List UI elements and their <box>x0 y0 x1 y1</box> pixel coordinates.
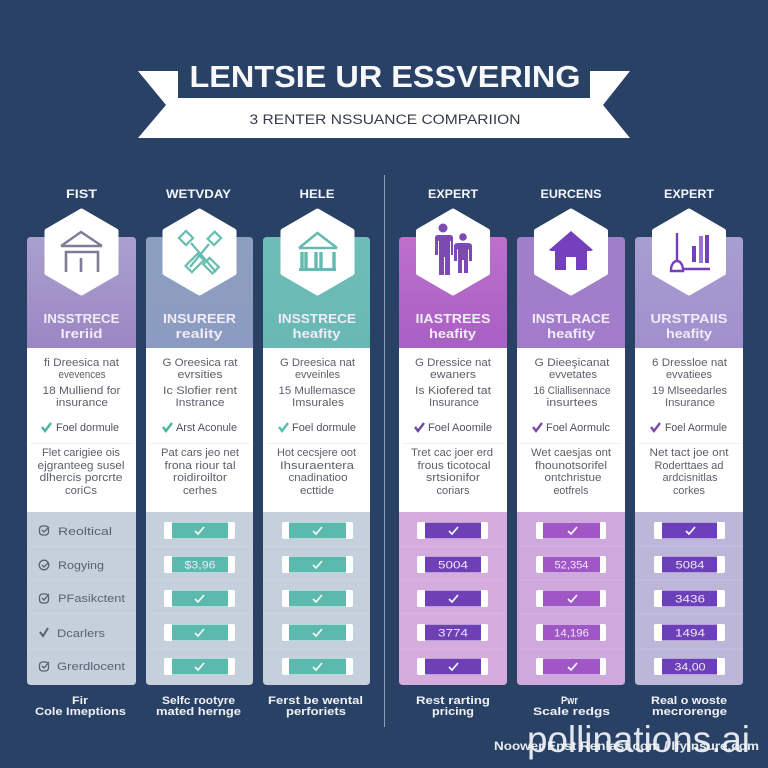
plan details <box>411 357 493 497</box>
value badges: 52,354 <box>554 560 588 572</box>
plan details: Is Kiofered tat <box>415 385 491 397</box>
panel: column 1: Cole Imeptions <box>35 706 126 718</box>
panel: column 4 <box>399 187 507 718</box>
value badges: 34,00 <box>674 662 706 674</box>
value badges: 3436 <box>675 594 705 606</box>
plan details: evvetates <box>549 369 597 381</box>
plan details: Instrance <box>176 397 224 409</box>
value badges: 1494 <box>675 628 705 640</box>
panel: column 5: heafity <box>547 326 596 341</box>
plan details: fhounotsorifel <box>535 460 607 472</box>
plan details <box>38 357 124 497</box>
plan details: Insurance <box>665 397 715 409</box>
plan details: roidiroiltor <box>173 472 227 484</box>
value badges <box>536 522 606 675</box>
plan name: IIASTREES <box>416 311 491 326</box>
plan details: corkes <box>673 485 705 497</box>
panel: column 2: reality <box>176 326 223 341</box>
plan details <box>161 357 239 497</box>
check badges <box>282 522 353 675</box>
plan details: fi Dreesica nat <box>44 357 119 369</box>
plan details: Net tact joe ont <box>650 447 728 459</box>
plan details: Foel Aormule <box>665 422 727 434</box>
panel: column 3: perforiets <box>286 706 346 718</box>
plan details: frous ticotocal <box>418 460 490 472</box>
feature rows: Reoltical <box>58 526 112 538</box>
plan details: 6 Dressloe nat <box>652 357 727 369</box>
center divider <box>384 175 386 727</box>
panel: column 3 <box>263 187 370 718</box>
plan name: INSTLRACE <box>532 311 610 326</box>
panel: column 4: heafity <box>429 326 477 341</box>
plan details: Foel dormule <box>56 422 119 434</box>
plan details: ejgranteeg susel <box>38 460 124 472</box>
plan details: Foel Aoomile <box>428 422 492 434</box>
plan details: dlhercis porcrte <box>40 472 122 484</box>
feature rows: Rogying <box>58 560 104 572</box>
value badges: 5004 <box>438 560 468 572</box>
plan details: Hot cecsjere oot <box>277 447 356 459</box>
icon: house <box>47 211 116 293</box>
value badges <box>164 522 235 675</box>
caption: Fir <box>72 695 89 707</box>
column heading: FIST <box>66 187 98 201</box>
plan details: 15 Mullemasce <box>278 385 356 397</box>
feature rows: Grerdlocent <box>57 661 125 673</box>
panel: column 6: mecrorenge <box>652 706 727 718</box>
plan details: G Dieeşicanat <box>534 357 610 369</box>
caption: Real o woste <box>651 695 727 707</box>
plan details: evevences <box>58 369 106 381</box>
plan details: ardcisnitlas <box>662 472 718 484</box>
title banner <box>138 59 630 138</box>
icon: bank building <box>283 211 352 293</box>
feature rows: PFasikctent <box>58 593 125 605</box>
plan details: Arst Aconule <box>176 422 237 434</box>
icon: two people <box>418 211 488 293</box>
plan details: evvatiees <box>666 369 712 381</box>
plan details: Ihsuraentera <box>280 460 355 472</box>
plan details: coriars <box>436 485 470 497</box>
plan details: cnadinatioo <box>288 472 348 484</box>
panel: column 6 <box>635 187 743 718</box>
value badges: 5084 <box>676 560 704 572</box>
plan details: Insurance <box>429 397 479 409</box>
plan details: evveinles <box>295 369 340 381</box>
watermark: pollinations.ai <box>527 719 750 760</box>
plan details: 18 Mulliend for <box>42 385 121 397</box>
column heading: HELE <box>300 187 334 201</box>
plan details: Roderttaes ad <box>654 460 724 472</box>
icon: house solid <box>536 211 606 293</box>
plan details: evrsities <box>178 369 223 381</box>
plan details: ecttide <box>300 485 334 497</box>
icon: bar chart <box>654 211 724 293</box>
icon: crossed keys <box>165 211 234 293</box>
title: LENTSIE UR ESSVERING <box>190 59 580 94</box>
plan details: insurance <box>56 397 108 409</box>
caption: Pwr <box>561 695 579 707</box>
column heading: EXPERT <box>664 187 715 201</box>
value badges <box>417 522 488 675</box>
plan details: Imsurales <box>292 397 345 409</box>
column heading: EXPERT <box>428 187 479 201</box>
source credit: Noower Enst Renlast.com / Ifyinsure.com <box>494 739 759 753</box>
plan details: G Dreesica nat <box>280 357 355 369</box>
plan details: 16 Cliallisennace <box>534 385 610 397</box>
value badges: $3,96 <box>184 560 216 572</box>
panel: column 4: pricing <box>432 706 474 718</box>
plan details: Wet caesjas ont <box>531 447 611 459</box>
plan name: INSUREER <box>163 311 237 326</box>
panel: column 3: heafity <box>292 326 341 341</box>
panel: column 5 <box>517 187 625 718</box>
column heading: EURCENS <box>540 187 602 201</box>
panel: column 1: Ireriid <box>60 326 103 341</box>
plan details: coriCs <box>65 485 98 497</box>
value badges: 14,196 <box>554 628 589 640</box>
column heading: WETVDAY <box>166 187 231 201</box>
plan details: ewaners <box>430 369 477 381</box>
plan details: G Dressice nat <box>415 357 491 369</box>
plan details <box>277 357 356 497</box>
plan details <box>531 357 611 497</box>
panel: column 5: Scale redgs <box>533 706 610 718</box>
value badges: 3774 <box>438 628 468 640</box>
plan details: Flet carigiee ois <box>42 447 120 459</box>
plan name: INSSTRECE <box>44 311 120 326</box>
subtitle: 3 RENTER NSSUANCE COMPARIION <box>250 112 520 127</box>
plan details <box>650 357 728 497</box>
plan name: INSSTRECE <box>278 311 356 326</box>
caption: Selfc rootyre <box>162 695 235 707</box>
plan details: Tret cac joer erd <box>411 447 493 459</box>
feature rows <box>39 526 125 673</box>
panel: column 2 <box>146 187 253 718</box>
plan name: URSTPAIIS <box>650 311 728 326</box>
value badges <box>654 522 725 675</box>
caption: Rest rarting <box>416 695 490 707</box>
plan details: Pat cars jeo net <box>161 447 239 459</box>
panel: column 2: mated hernge <box>156 706 241 718</box>
plan details: insurtees <box>546 397 598 409</box>
plan details: Ic Slofier rent <box>163 385 237 397</box>
plan details: frona riour tal <box>164 460 236 472</box>
plan details: 19 Mlseedarles <box>652 385 728 397</box>
plan details: srtsionifor <box>426 472 480 484</box>
feature rows: Dcarlers <box>57 628 106 640</box>
plan details: G Oreesica rat <box>162 357 238 369</box>
plan details: Foel Aormulc <box>546 422 610 434</box>
panel: column 1 <box>27 187 136 718</box>
plan details: eotfrels <box>554 485 589 497</box>
plan details: cerhes <box>183 485 217 497</box>
caption: Ferst be wental <box>268 695 363 707</box>
plan details: Foel dormule <box>292 422 356 434</box>
panel: column 6: heafity <box>666 326 713 341</box>
plan details: ontchristue <box>544 472 602 484</box>
